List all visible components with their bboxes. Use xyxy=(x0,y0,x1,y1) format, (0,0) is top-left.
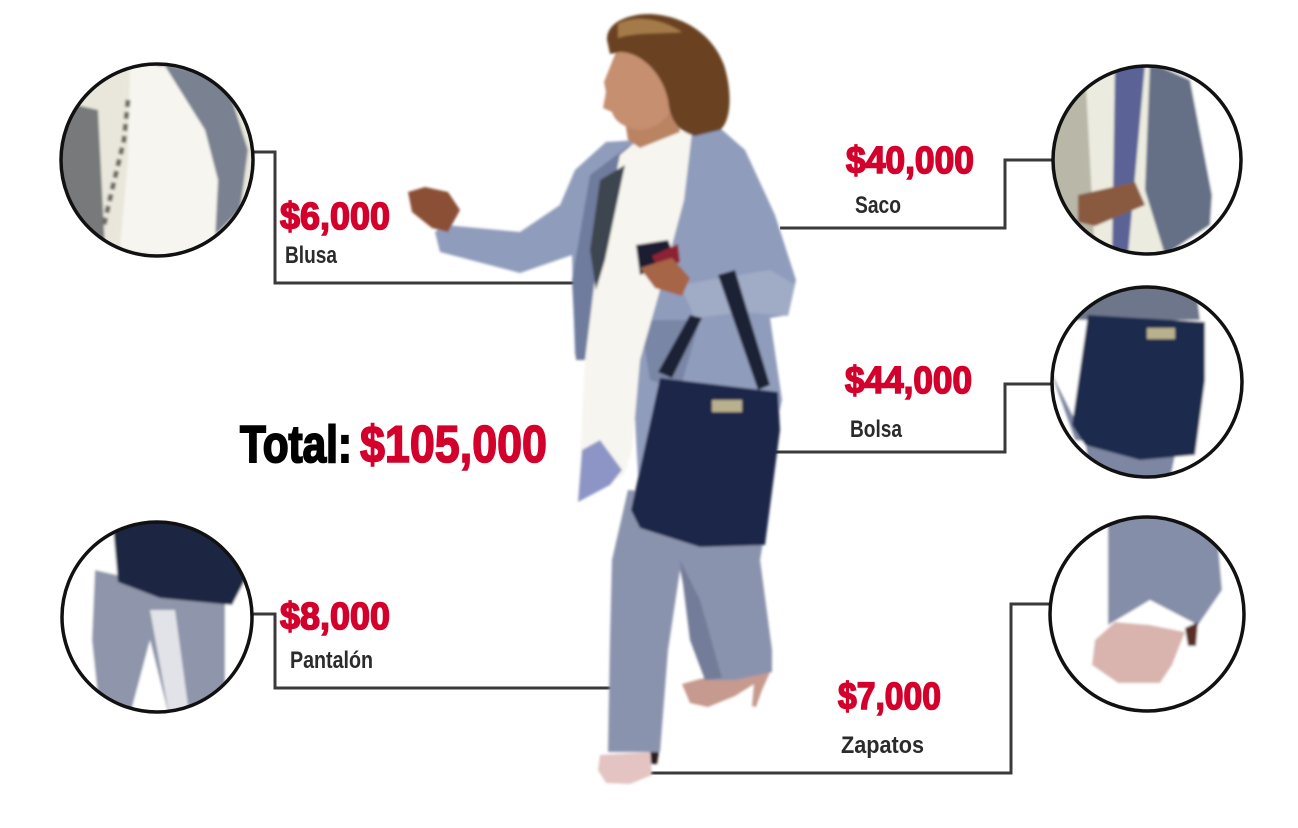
total xyxy=(240,416,547,474)
bag handle xyxy=(658,270,770,390)
trousers xyxy=(608,490,772,752)
connector lines xyxy=(250,152,1056,773)
item: blusa: Blusa xyxy=(285,242,338,269)
item: bolsa xyxy=(845,360,972,443)
circle: saco detail xyxy=(1051,64,1243,256)
total: Total: xyxy=(240,416,352,474)
circle: blusa detail xyxy=(59,62,255,258)
circle: pantalon detail xyxy=(60,520,254,714)
item: bolsa: Bolsa xyxy=(850,416,903,443)
item: blusa xyxy=(280,196,390,269)
item: pantalon: Pantalón xyxy=(290,647,373,674)
hair xyxy=(607,14,730,136)
back shoe xyxy=(682,668,772,707)
circle: bolsa detail xyxy=(1050,285,1244,479)
total: $105,000 xyxy=(360,416,547,474)
jacket xyxy=(435,128,796,510)
bag xyxy=(631,378,780,547)
item: saco: $40,000 xyxy=(846,140,974,182)
neck and face xyxy=(624,105,680,148)
item: zapatos: Zapatos xyxy=(841,732,924,759)
item: pantalon: $8,000 xyxy=(280,596,390,638)
hand left xyxy=(408,187,460,232)
item: bolsa: $44,000 xyxy=(845,360,972,402)
hand right with red object xyxy=(636,240,676,275)
item: zapatos: $7,000 xyxy=(838,676,941,718)
item: saco xyxy=(846,140,974,219)
item: blusa: $6,000 xyxy=(280,196,390,238)
item: pantalon xyxy=(280,596,390,674)
blouse dark lining xyxy=(572,145,630,360)
front shoe xyxy=(598,752,652,784)
item: saco: Saco xyxy=(855,192,901,219)
central figure xyxy=(408,14,796,784)
circle: zapatos detail xyxy=(1045,510,1250,717)
scarf xyxy=(578,130,692,502)
item: zapatos xyxy=(838,676,941,759)
